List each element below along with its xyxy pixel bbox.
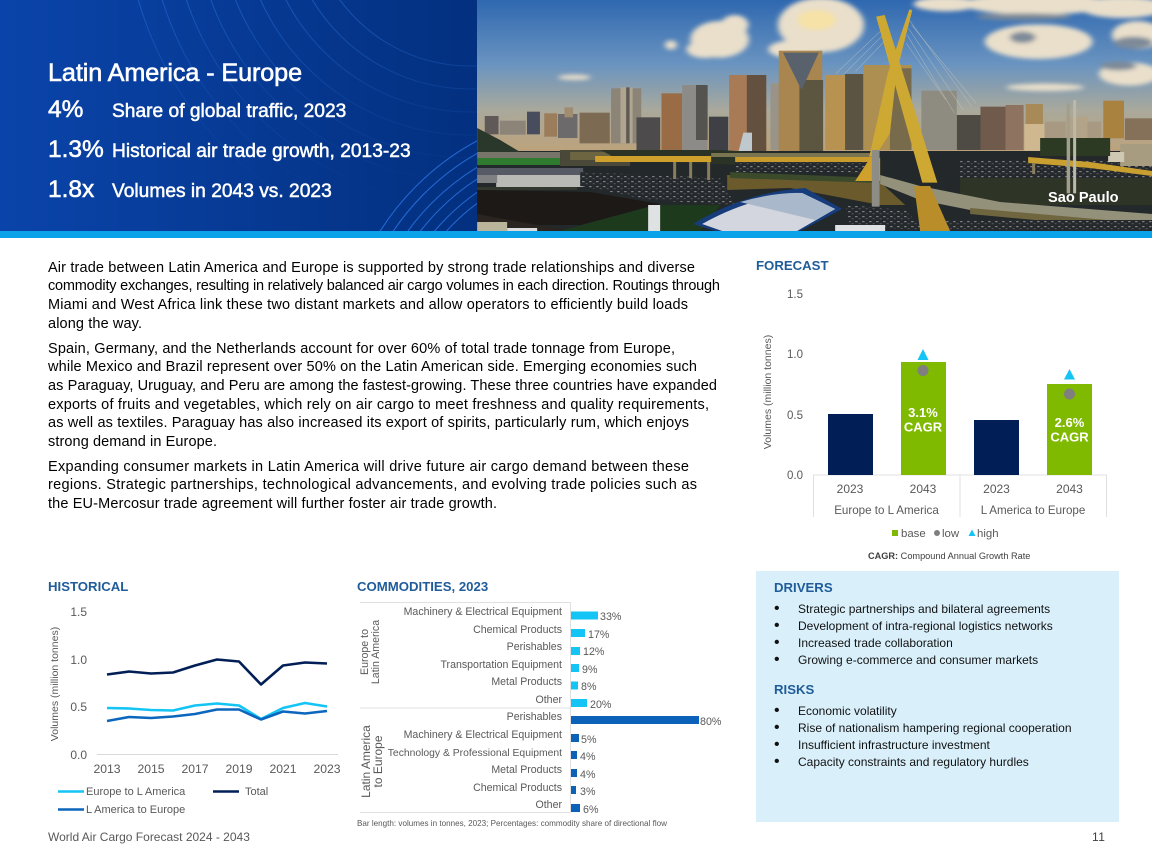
cables (836, 20, 976, 113)
CAGR labels: CAGR (904, 420, 943, 434)
x axis labels: 2021 (269, 762, 297, 776)
drivers list: Strategic partnerships and bilateral agreements (798, 602, 1050, 616)
panel: drivers and risks (756, 571, 1119, 822)
body text: commodity exchanges, resulting in relatively balanced air cargo volumes in each direction. Routings through (48, 278, 720, 294)
drivers list (774, 600, 1053, 668)
legend: base (901, 528, 926, 540)
bars: Latin America to Europe (571, 716, 699, 812)
CAGR labels: 2.6% (1055, 415, 1085, 430)
stat: share: 4% (48, 96, 83, 123)
category labels: Metal Products (491, 764, 562, 776)
legend: Europe to L America (86, 786, 186, 798)
drivers list: Growing e-commerce and consumer markets (798, 653, 1038, 667)
x axis labels: 2015 (137, 762, 165, 776)
percentage labels: 33% (600, 611, 622, 623)
drivers list: • (774, 651, 780, 668)
parking (845, 205, 925, 231)
risks list: • (774, 736, 780, 753)
heading: commodities: COMMODITIES, 2023 (357, 579, 488, 594)
percentage labels: 4% (580, 769, 596, 781)
ground, real page coordinates (476, 128, 1152, 231)
category labels: Technology & Professional Equipment (388, 748, 562, 759)
percentage labels: 17% (588, 629, 610, 641)
CAGR labels (904, 405, 1089, 444)
risks list (774, 702, 1072, 770)
body text (48, 260, 720, 512)
stat: volumes: Volumes in 2043 vs. 2023 (112, 181, 332, 202)
stat: share: Share of global traffic, 2023 (112, 101, 346, 122)
curved roadway (880, 175, 1152, 224)
risks list: • (774, 719, 780, 736)
forecast chart: 1.5 (787, 289, 803, 301)
category labels: 2043 (910, 482, 937, 496)
stat: growth: Historical air trade growth, 2013-23 (112, 141, 411, 162)
legend: high (977, 528, 999, 540)
main towers (611, 88, 641, 143)
percentage labels (580, 611, 722, 816)
line: Total (107, 660, 327, 684)
body text: the EU-Mercosur trade agreement will further foster air trade growth. (48, 496, 497, 512)
distant buildings (485, 101, 1152, 152)
percentage labels: 80% (700, 716, 722, 728)
footer title: World Air Cargo Forecast 2024 - 2043 (48, 830, 250, 844)
stat: growth: 1.3% (48, 136, 104, 163)
heading: historical: HISTORICAL (48, 579, 128, 594)
historical line chart: 1.0 (70, 653, 87, 667)
pylon foot (914, 186, 950, 231)
scenario markers (918, 349, 1075, 400)
x axis labels: 2013 (93, 762, 121, 776)
category labels: Europe to L America (834, 504, 939, 517)
forecast chart (762, 289, 1107, 561)
header banner (0, 0, 1152, 238)
body text: while Mexico and Brazil represent over 50% on the Latin American side. Emerging economies such (48, 359, 697, 375)
commodities footnote: Bar length: volumes in tonnes, 2023; Percentages: commodity share of directional flow (357, 819, 667, 828)
overpass (595, 156, 711, 162)
risks list: Capacity constraints and regulatory hurdles (798, 755, 1029, 769)
body text: exports of fruits and vegetables, which rely on air cargo to meet freshness and quality requirements, (48, 397, 709, 413)
forecast chart: 0.0 (787, 470, 803, 482)
category labels: Chemical Products (473, 624, 562, 636)
risks list: • (774, 753, 780, 770)
header blue panel with arcs (0, 0, 477, 231)
y axis label: Volumes (million tonnes) (49, 627, 61, 741)
percentage labels: 6% (583, 804, 599, 816)
title: Latin America - Europe (48, 59, 302, 87)
category labels: Transportation Equipment (440, 659, 562, 671)
heading: risks: RISKS (774, 682, 814, 697)
stat: share (48, 96, 346, 123)
percentage labels: 9% (582, 664, 598, 676)
forecast chart: 1.0 (787, 349, 803, 361)
drivers list: • (774, 617, 780, 634)
drivers list: • (774, 634, 780, 651)
forecast chart: 0.5 (787, 410, 803, 422)
body text: Air trade between Latin America and Europe is supported by strong trade relationships and diverse (48, 260, 695, 276)
body text: Miami and West Africa link these two distant markets and allow operators to efficiently build loads (48, 297, 688, 313)
drivers list: Development of intra-regional logistics networks (798, 619, 1053, 633)
risks list: Economic volatility (798, 704, 897, 718)
category labels: Machinery & Electrical Equipment (404, 606, 562, 618)
stat: volumes (48, 176, 332, 203)
stat: growth (48, 136, 411, 163)
x axis labels (93, 762, 341, 776)
risks list: • (774, 702, 780, 719)
photo caption: Sao Paulo: Sao Paulo (1048, 190, 1119, 206)
x axis labels: 2019 (225, 762, 253, 776)
risks list: Rise of nationalism hampering regional cooperation (798, 721, 1072, 735)
bridge pylon (869, 9, 937, 183)
line: Europe to L America (107, 703, 327, 719)
group labels: Europe to (359, 629, 371, 675)
category labels: Perishables (507, 711, 562, 723)
CAGR labels: 3.1% (908, 405, 938, 420)
category labels (388, 606, 562, 811)
historical line chart: 0.0 (70, 748, 87, 762)
percentage labels: 20% (590, 699, 612, 711)
bars: Europe to Latin America (571, 612, 598, 707)
legend: low (942, 528, 960, 540)
category labels: 2023 (837, 482, 864, 496)
category labels: Perishables (507, 641, 562, 653)
bars (828, 362, 1092, 475)
legend: L America to Europe (86, 804, 185, 816)
line: L America to Europe (107, 710, 327, 721)
risks list: Insufficient infrastructure investment (798, 738, 990, 752)
dome (693, 188, 842, 231)
group labels (359, 620, 385, 798)
group labels: Latin America (359, 725, 373, 798)
percentage labels: 5% (581, 734, 597, 746)
heading: forecast: FORECAST (756, 258, 829, 273)
header text block (48, 59, 411, 203)
group labels: to Europe (371, 735, 385, 788)
body text: as Paraguay, Uruguay, and Peru are among the fastest-growing. These three countries have expanded (48, 378, 717, 394)
heading: drivers: DRIVERS (774, 580, 833, 595)
category labels (834, 482, 1085, 517)
category labels: Other (536, 694, 562, 706)
body text: strong demand in Europe. (48, 434, 217, 450)
percentage labels: 3% (580, 786, 596, 798)
y axis label: Volumes (million tonnes) (762, 335, 774, 449)
legend (892, 528, 999, 540)
percentage labels: 8% (581, 681, 597, 693)
historical line chart: 0.5 (70, 700, 87, 714)
CAGR labels: CAGR (1050, 430, 1089, 444)
drivers list: • (774, 600, 780, 617)
category labels: Other (536, 799, 562, 811)
body text: along the way. (48, 316, 142, 332)
category labels: 2023 (983, 482, 1010, 496)
percentage labels: 12% (583, 646, 605, 658)
legend: Total (245, 786, 268, 798)
category labels: L America to Europe (981, 504, 1085, 517)
stat: volumes: 1.8x (48, 176, 94, 203)
group labels: Latin America (370, 620, 382, 684)
legend (58, 786, 268, 816)
body text: regions. Strategic partnerships, technological advancements, and evolving trade policies such as (48, 477, 697, 493)
body text: as well as textiles. Paraguay has also increased its export of spirits, particularly rum, which enjoys (48, 415, 689, 431)
body text: Spain, Germany, and the Netherlands account for over 60% of total trade tonnage from Europe, (48, 341, 675, 357)
river and reflections (600, 150, 880, 175)
cyan strip (0, 231, 1152, 238)
category labels: Metal Products (491, 676, 562, 688)
category labels: Chemical Products (473, 782, 562, 794)
percentage labels: 4% (580, 751, 596, 763)
historical line chart (49, 605, 341, 816)
photo: Sao Paulo skyline and bridge (477, 0, 1152, 231)
drivers list: Increased trade collaboration (798, 636, 953, 650)
historical line chart: 1.5 (70, 605, 87, 619)
x axis labels: 2023 (313, 762, 341, 776)
category labels: Machinery & Electrical Equipment (404, 729, 562, 741)
CAGR note: CAGR: Compound Annual Growth Rate (868, 551, 1030, 561)
page number: 11 (1092, 830, 1105, 844)
x axis labels: 2017 (181, 762, 209, 776)
category labels: 2043 (1056, 482, 1083, 496)
commodities bar chart (359, 602, 722, 816)
body text: Expanding consumer markets in Latin America will drive future air cargo demand between these (48, 459, 689, 475)
